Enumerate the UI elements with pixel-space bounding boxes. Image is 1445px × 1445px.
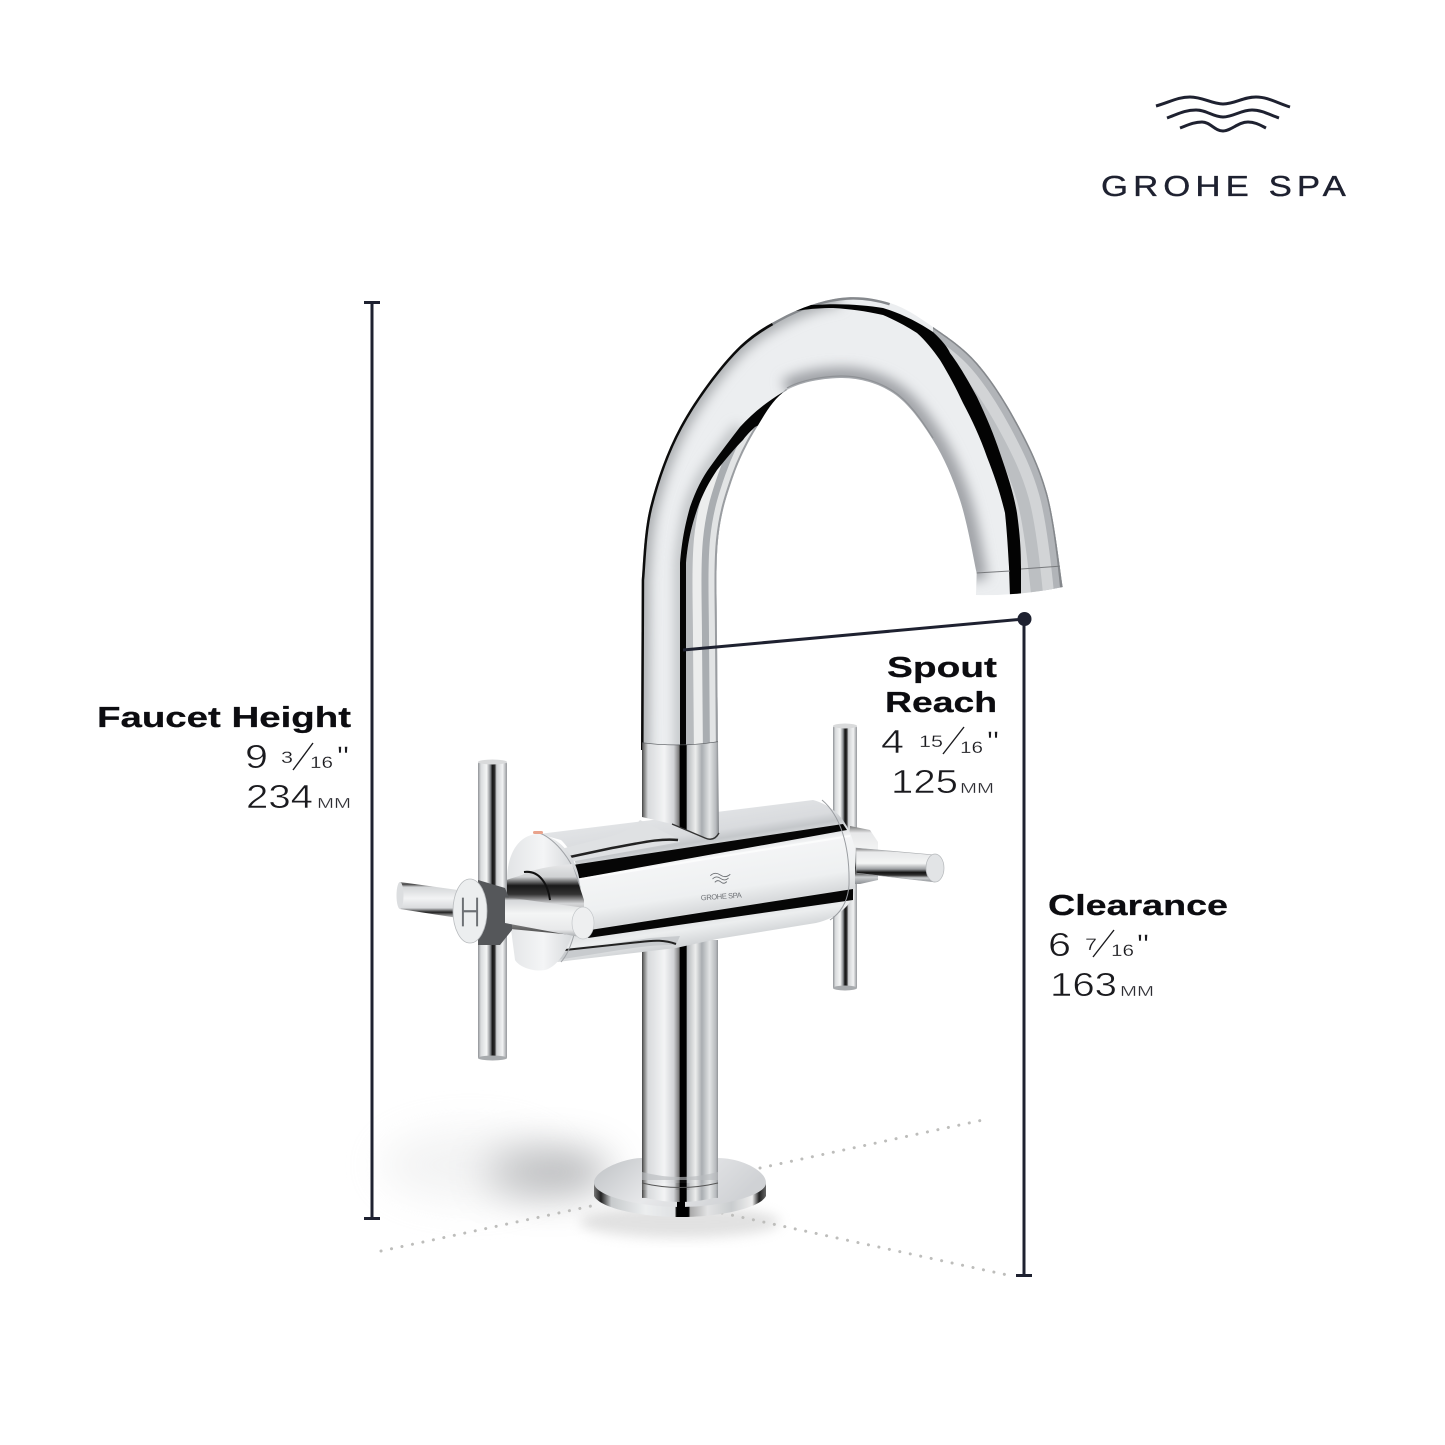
label: clearance: 6	[1048, 926, 1071, 963]
upper stem lower segment	[642, 742, 719, 839]
label: faucet height: 16	[310, 753, 333, 772]
left handle vertical bar	[478, 760, 507, 1060]
faucet	[396, 290, 1068, 1217]
spout tip ring	[976, 566, 1062, 573]
label: spout reach: 16	[960, 738, 983, 757]
label: clearance: Clearance	[1048, 890, 1228, 922]
valve body	[539, 800, 855, 962]
body lower black band	[588, 889, 853, 938]
label: spout reach: 125	[891, 763, 958, 800]
label: clearance	[1048, 890, 1228, 1003]
spout top edge grey	[772, 297, 890, 323]
dimension: spout reach line	[683, 619, 1024, 650]
label: spout reach: 4	[881, 723, 904, 760]
label: faucet height: "	[337, 741, 349, 774]
left handle outer arm	[396, 882, 458, 918]
engraved wordmark: GROHE SPA	[701, 891, 742, 902]
left handle hub collar	[478, 880, 512, 945]
spout shading beside black band	[681, 427, 740, 760]
label: clearance: 163	[1050, 966, 1117, 1003]
right handle hub	[848, 826, 878, 884]
label: spout reach: 15	[919, 732, 943, 751]
label: spout reach: MM	[960, 780, 994, 797]
label: spout reach: Spout	[887, 652, 997, 684]
left valve cap	[507, 831, 580, 971]
body upper black band	[566, 824, 847, 880]
label: clearance: 7	[1085, 935, 1097, 954]
dotted floor guide lines	[381, 1120, 1012, 1276]
letter H on hub: H	[459, 888, 481, 937]
spout inner thin edge line	[787, 376, 933, 438]
spout outer black band	[794, 304, 1021, 594]
label: clearance: 16	[1111, 941, 1134, 960]
collar sweep under stem	[557, 820, 680, 862]
label: faucet height: 234	[246, 778, 313, 815]
label: spout reach: "	[987, 726, 999, 759]
left handle hub disc with H	[453, 879, 487, 943]
label: faucet height: Faucet Height	[97, 702, 351, 734]
label: faucet height	[97, 702, 351, 815]
engraved logo on body	[699, 872, 742, 902]
spout base fill	[648, 300, 1010, 744]
label: clearance: MM	[1120, 983, 1154, 1000]
spout left inner silver bands	[716, 390, 787, 760]
spout outer-left soft shading	[641, 298, 840, 760]
spout silver crescent bands	[933, 327, 1063, 594]
spout inner-edge shading	[787, 378, 977, 580]
stem collar seam	[642, 742, 718, 745]
logo wordmark: GROHE SPA	[1101, 170, 1346, 202]
spout outer edge dark line	[641, 323, 772, 760]
spout inner black band	[680, 392, 783, 760]
left handle neck	[487, 864, 584, 936]
left handle front arm	[505, 897, 594, 939]
label: faucet height: 3	[281, 748, 293, 767]
icon: three waves	[1156, 97, 1290, 131]
label: faucet height: MM	[317, 795, 351, 812]
spout	[636, 290, 1068, 760]
engraved waves	[710, 872, 731, 884]
infographic canvas	[99, 96, 1346, 1277]
right handle vertical bar	[833, 724, 857, 990]
body bright line	[562, 836, 850, 882]
right handle arm	[856, 848, 944, 882]
floor shadow	[380, 1129, 780, 1238]
lower stem	[642, 940, 718, 1198]
body right seam	[822, 800, 849, 920]
label: spout reach: Reach	[885, 687, 997, 719]
logo: GROHE SPA	[1101, 97, 1346, 202]
dimension: clearance line with dot	[1016, 612, 1032, 1276]
base plate	[594, 1158, 766, 1217]
label: clearance: "	[1137, 929, 1149, 962]
label: faucet height: 9	[245, 738, 268, 775]
dimension: faucet height line	[364, 302, 380, 1219]
label: spout reach	[881, 652, 999, 800]
